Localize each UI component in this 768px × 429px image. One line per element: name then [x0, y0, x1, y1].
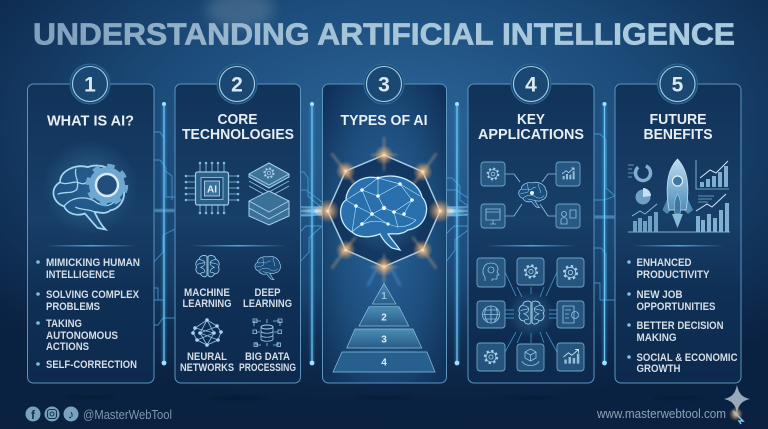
pyramid: 4: [381, 358, 387, 368]
heading: what is AI: WHAT IS AI?: [47, 114, 134, 130]
pyramid: 3: [381, 334, 387, 346]
circuit connectors between panels: [154, 132, 615, 325]
bullet list: what is AI: ACTIONS: [46, 341, 89, 353]
label: deep learning: DEEP: [254, 287, 280, 299]
pyramid: [333, 283, 435, 372]
panel 5: future benefits: [615, 64, 741, 383]
badge 4: [511, 64, 551, 104]
bullet list: future benefits: PRODUCTIVITY: [636, 269, 710, 281]
bullet list: what is AI: MIMICKING HUMAN: [46, 257, 140, 269]
badge 1: 1: [84, 74, 96, 96]
heading: key applications: [478, 112, 584, 143]
icon: AI chip: AI: [207, 184, 217, 196]
flare rays: [332, 138, 436, 285]
bullet list: future benefits: OPPORTUNITIES: [636, 301, 716, 313]
divider: [45, 245, 137, 246]
badge 5: [658, 64, 698, 104]
octagon node flares: [316, 145, 452, 277]
label: neural networks: NEURAL: [187, 351, 227, 363]
label: neural networks: [180, 351, 234, 374]
title: UNDERSTANDING ARTIFICIAL INTELLIGENCE: [33, 16, 735, 52]
badge 4: 4: [525, 74, 537, 96]
badge 5: 5: [672, 74, 684, 96]
social handle: @MasterWebTool: [83, 408, 172, 422]
bullet list: future benefits: MAKING: [636, 332, 676, 344]
bullet list: future benefits: GROWTH: [636, 363, 681, 375]
dashboard charts: [628, 160, 730, 232]
bullet list: what is AI: PROBLEMS: [46, 301, 100, 313]
label: machine learning: MACHINE: [184, 287, 230, 299]
bullet list: what is AI: [36, 257, 140, 371]
divider: [485, 245, 577, 246]
icon: big data: [253, 319, 282, 346]
bullet list: future benefits: [627, 257, 738, 375]
panel 4: key applications: [468, 64, 594, 383]
icon: deep learning brain: [255, 256, 281, 280]
icon: machine learning brain: [196, 255, 219, 277]
badge 1: [70, 64, 110, 104]
social icons: ♪: [68, 408, 74, 422]
label: big data processing: BIG DATA: [245, 351, 290, 363]
label: big data processing: [239, 351, 296, 374]
application diagram: [481, 162, 580, 228]
bullet list: what is AI: AUTONOMOUS: [46, 330, 118, 342]
heading: core technologies: CORE: [218, 112, 258, 128]
icon: server stack: [249, 163, 289, 225]
website url: www.masterwebtool.com: [596, 407, 726, 421]
bullet list: future benefits: BETTER DECISION: [636, 320, 724, 332]
badge 3: 3: [378, 74, 390, 96]
icon: sparkle and cursor: [724, 385, 750, 424]
pyramid: 1: [381, 291, 387, 302]
icon: AI chip: [185, 162, 239, 214]
heading: core technologies: [182, 112, 294, 143]
social icons: f: [31, 408, 36, 422]
octagon with dark core: [328, 155, 440, 267]
panel 1: what is AI: [28, 64, 154, 383]
badge 2: 2: [231, 74, 243, 96]
panel shadows: [66, 396, 702, 400]
badge 2: [217, 64, 257, 104]
icon: neural network: [191, 318, 223, 347]
application icon grid: [477, 258, 584, 371]
label: machine learning: [182, 287, 232, 310]
bullet list: what is AI: TAKING: [46, 318, 82, 330]
heading: core technologies: TECHNOLOGIES: [182, 127, 294, 143]
label: neural networks: NETWORKS: [180, 362, 234, 374]
heading: key applications: KEY: [517, 112, 545, 128]
heading: future benefits: [644, 112, 713, 143]
bullet list: future benefits: NEW JOB: [636, 289, 683, 301]
bullet list: what is AI: SELF-CORRECTION: [46, 359, 137, 371]
pyramid: 2: [381, 312, 387, 324]
glowing vertical connector lines: [162, 102, 607, 365]
social icons: [26, 406, 78, 422]
icon: rocket: [662, 159, 693, 228]
bullet list: future benefits: SOCIAL & ECONOMIC: [636, 352, 738, 364]
heading: future benefits: FUTURE: [650, 112, 707, 128]
icon: glowing network brain: [341, 170, 427, 254]
divider: [190, 245, 286, 246]
label: machine learning: LEARNING: [182, 298, 232, 310]
divider: [632, 245, 724, 246]
bullet list: what is AI: INTELLIGENCE: [46, 269, 115, 281]
label: deep learning: [243, 287, 292, 310]
label: deep learning: LEARNING: [243, 298, 292, 310]
bullet list: what is AI: SOLVING COMPLEX: [46, 289, 140, 301]
label: big data processing: PROCESSING: [239, 362, 296, 374]
panel 3: types of AI: [316, 64, 452, 383]
badge 3: [364, 64, 404, 104]
icon: brain with gear: [42, 139, 138, 235]
panel 2: core technologies: [175, 64, 300, 383]
bullet list: future benefits: ENHANCED: [636, 257, 692, 269]
heading: types of AI: TYPES OF AI: [340, 113, 428, 129]
heading: future benefits: BENEFITS: [644, 127, 713, 143]
heading: key applications: APPLICATIONS: [478, 127, 584, 143]
